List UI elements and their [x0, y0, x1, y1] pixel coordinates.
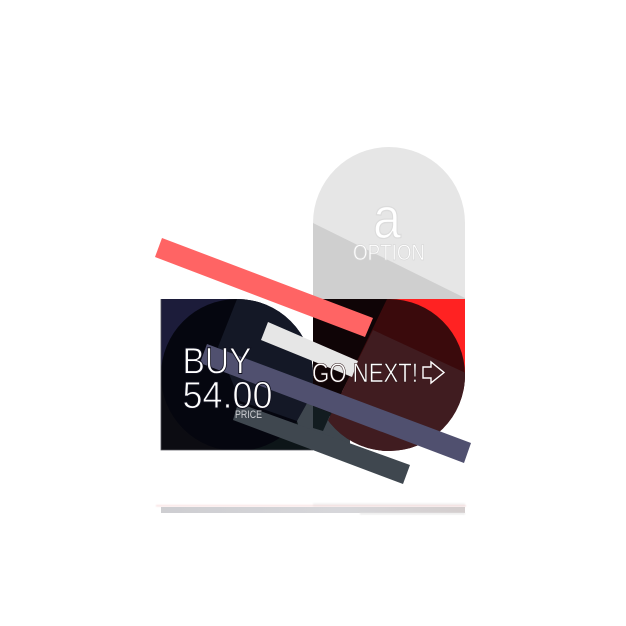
panel: red and black action block — [310, 299, 470, 455]
panel: grey option capsule — [313, 147, 465, 299]
icon: outlined right arrow — [423, 362, 444, 383]
panel: dark navy price block — [161, 299, 320, 451]
bar: white diagonal — [261, 322, 358, 377]
label: option letter: a — [373, 186, 402, 251]
label: buy: BUY — [182, 340, 252, 382]
bar: dark wedge over slate — [313, 406, 331, 431]
label: go next: GO NEXT! — [312, 358, 418, 388]
bar: purple diagonal — [200, 344, 471, 463]
label: price amount: 54.00 — [182, 375, 272, 417]
bar: slate diagonal — [233, 403, 410, 484]
bar: slate fill under the circle — [297, 392, 350, 450]
bar: coral diagonal — [155, 238, 373, 337]
reflection strip — [156, 503, 466, 514]
label: option: OPTION — [353, 240, 425, 265]
label: price caption: PRICE — [235, 409, 262, 421]
